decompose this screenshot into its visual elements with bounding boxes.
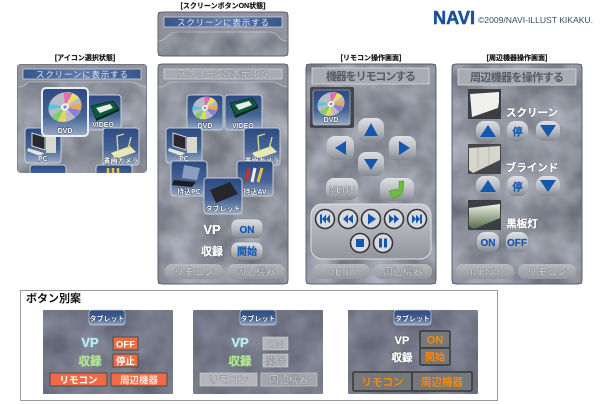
remote button disabled: リモコン — [527, 266, 567, 278]
arrow left — [327, 136, 354, 160]
peripheral button disabled: 周辺機器 — [383, 266, 423, 278]
image: screen — [468, 89, 501, 119]
recording label: 収録 — [78, 354, 102, 368]
caption: remote screen: [リモコン操作画面] — [341, 53, 401, 62]
up — [476, 121, 500, 141]
heading: ボタン別案 — [26, 291, 81, 305]
fast forward — [384, 210, 404, 228]
alternative 1: coral — [43, 310, 173, 394]
arrow up — [358, 118, 384, 142]
VP ON button — [231, 219, 263, 238]
recording label: 収録 — [392, 351, 413, 364]
MENU button disabled — [456, 264, 514, 279]
label: blind: ブラインド — [506, 161, 558, 174]
caption: screen button on state: [スクリーンボタンON状態] — [181, 1, 265, 10]
icon: PC: PC — [179, 156, 189, 163]
image: blind — [468, 144, 501, 174]
icon: DVD — [187, 93, 223, 130]
MENU button: MENU — [329, 185, 355, 195]
caption: icon selected state: [アイコン選択状態] — [55, 53, 115, 62]
OFF button: OFF — [116, 340, 135, 350]
recording start button — [231, 242, 263, 260]
alternative 3: orange — [348, 310, 478, 394]
copyright: ©2009/NAVI-ILLUST KIKAKU. — [478, 16, 593, 25]
arrow pad — [327, 118, 416, 176]
panel: icon grid screen — [158, 64, 288, 284]
ON: ON — [480, 238, 496, 249]
skip back — [316, 210, 334, 228]
VP label: VP — [203, 222, 221, 237]
start button: 開始 — [425, 350, 445, 364]
blind controls — [476, 176, 560, 196]
MENU button disabled: MENU — [327, 268, 356, 278]
panel: button alternatives — [20, 290, 498, 400]
panel: icon selected state — [17, 64, 147, 184]
pause — [374, 234, 392, 252]
VP label: VP — [81, 335, 99, 350]
OFF: OFF — [507, 238, 527, 249]
icon: carry-in PC — [171, 161, 207, 196]
arrow down — [358, 152, 384, 176]
icon: carry-in AV: 持込AV — [243, 187, 267, 196]
recording start button: 開始 — [237, 245, 257, 258]
icon: document camera — [244, 128, 280, 165]
label: screen: スクリーン — [506, 107, 558, 119]
remote button: リモコン — [59, 376, 98, 386]
screen controls — [476, 121, 560, 141]
DVD source icon: DVD — [324, 117, 338, 124]
panel: peripheral screen — [452, 64, 582, 284]
icon: DVD selected: DVD — [58, 128, 72, 135]
logo: NAVI — [433, 8, 475, 28]
icon: document camera: 書画カメラ — [104, 156, 138, 165]
tablet tab: タブレット — [240, 314, 276, 323]
peripheral button disabled — [227, 264, 285, 279]
playback console — [311, 204, 431, 259]
remote button: リモコン — [208, 374, 248, 386]
enter button — [380, 178, 414, 201]
MENU button — [326, 178, 358, 200]
icon: carry-in PC (cut off) — [30, 164, 66, 173]
panel: screen button on state — [158, 12, 288, 56]
header button: スクリーンに表示する — [36, 70, 128, 80]
DVD source icon — [310, 87, 354, 128]
header button: スクリーンに表示する — [177, 18, 269, 28]
icon: PC: PC — [38, 156, 48, 163]
recording label: 収録 — [201, 244, 223, 258]
VP ON button: ON — [240, 225, 254, 236]
caption: peripheral screen: [周辺機器操作画面] — [487, 53, 547, 62]
icon: DVD: DVD — [198, 123, 212, 130]
start button: 開始 — [266, 354, 286, 368]
MENU button disabled: MENU — [470, 268, 500, 278]
icon: video: VIDEO — [232, 123, 254, 130]
remote button disabled — [165, 264, 223, 279]
icon: tablet — [204, 178, 242, 214]
ON button: ON — [268, 340, 283, 350]
stop: 停 — [512, 126, 522, 138]
label: blackboard lamp: 黒板灯 — [506, 217, 538, 230]
stop: 停 — [512, 180, 522, 194]
up — [476, 176, 500, 196]
arrow right — [389, 136, 416, 160]
icon: carry-in AV (cut off) — [96, 164, 132, 173]
header button disabled: スクリーンに表示する — [177, 68, 269, 80]
peripheral button disabled: 周辺機器 — [236, 266, 276, 278]
MENU button disabled — [313, 264, 370, 279]
tablet tab: タブレット — [90, 314, 124, 323]
down — [536, 176, 560, 196]
header button disabled — [164, 68, 282, 80]
lamp controls — [477, 232, 528, 252]
header: 周辺機器を操作する — [470, 70, 564, 84]
skip forward — [408, 210, 426, 228]
play — [362, 210, 380, 228]
logo — [433, 8, 593, 28]
icon: carry-in PC: 持込PC — [177, 187, 201, 196]
VP label: VP — [395, 335, 409, 347]
header: 機器をリモコンする — [326, 69, 416, 83]
rewind — [338, 210, 358, 228]
peripheral button: 周辺機器 — [120, 374, 158, 386]
stop — [350, 234, 370, 252]
peripheral button disabled — [374, 264, 432, 279]
alternative 2: gray — [193, 310, 323, 394]
ON button: ON — [427, 334, 443, 346]
icon: PC — [166, 128, 202, 163]
peripheral button: 周辺機器 — [421, 376, 463, 388]
tablet tab: タブレット — [395, 314, 430, 323]
icon: video — [225, 95, 262, 130]
image: blackboard lamp — [468, 200, 501, 230]
icon: carry-in AV — [237, 161, 273, 196]
remote button disabled — [518, 264, 576, 279]
icon: video: VIDEO — [92, 122, 114, 129]
panel: remote screen — [306, 64, 436, 284]
icon: document camera: 書画カメラ — [244, 156, 280, 165]
remote button disabled: リモコン — [174, 266, 214, 278]
icon: tablet: タブレット — [206, 204, 240, 213]
remote button: リモコン — [362, 376, 404, 388]
stop button: 停止 — [116, 356, 135, 368]
down — [536, 121, 560, 141]
header — [458, 69, 576, 85]
peripheral button: 周辺機器 — [269, 374, 309, 386]
header — [312, 68, 429, 84]
VP label: VP — [231, 335, 249, 350]
recording label: 収録 — [228, 354, 252, 368]
